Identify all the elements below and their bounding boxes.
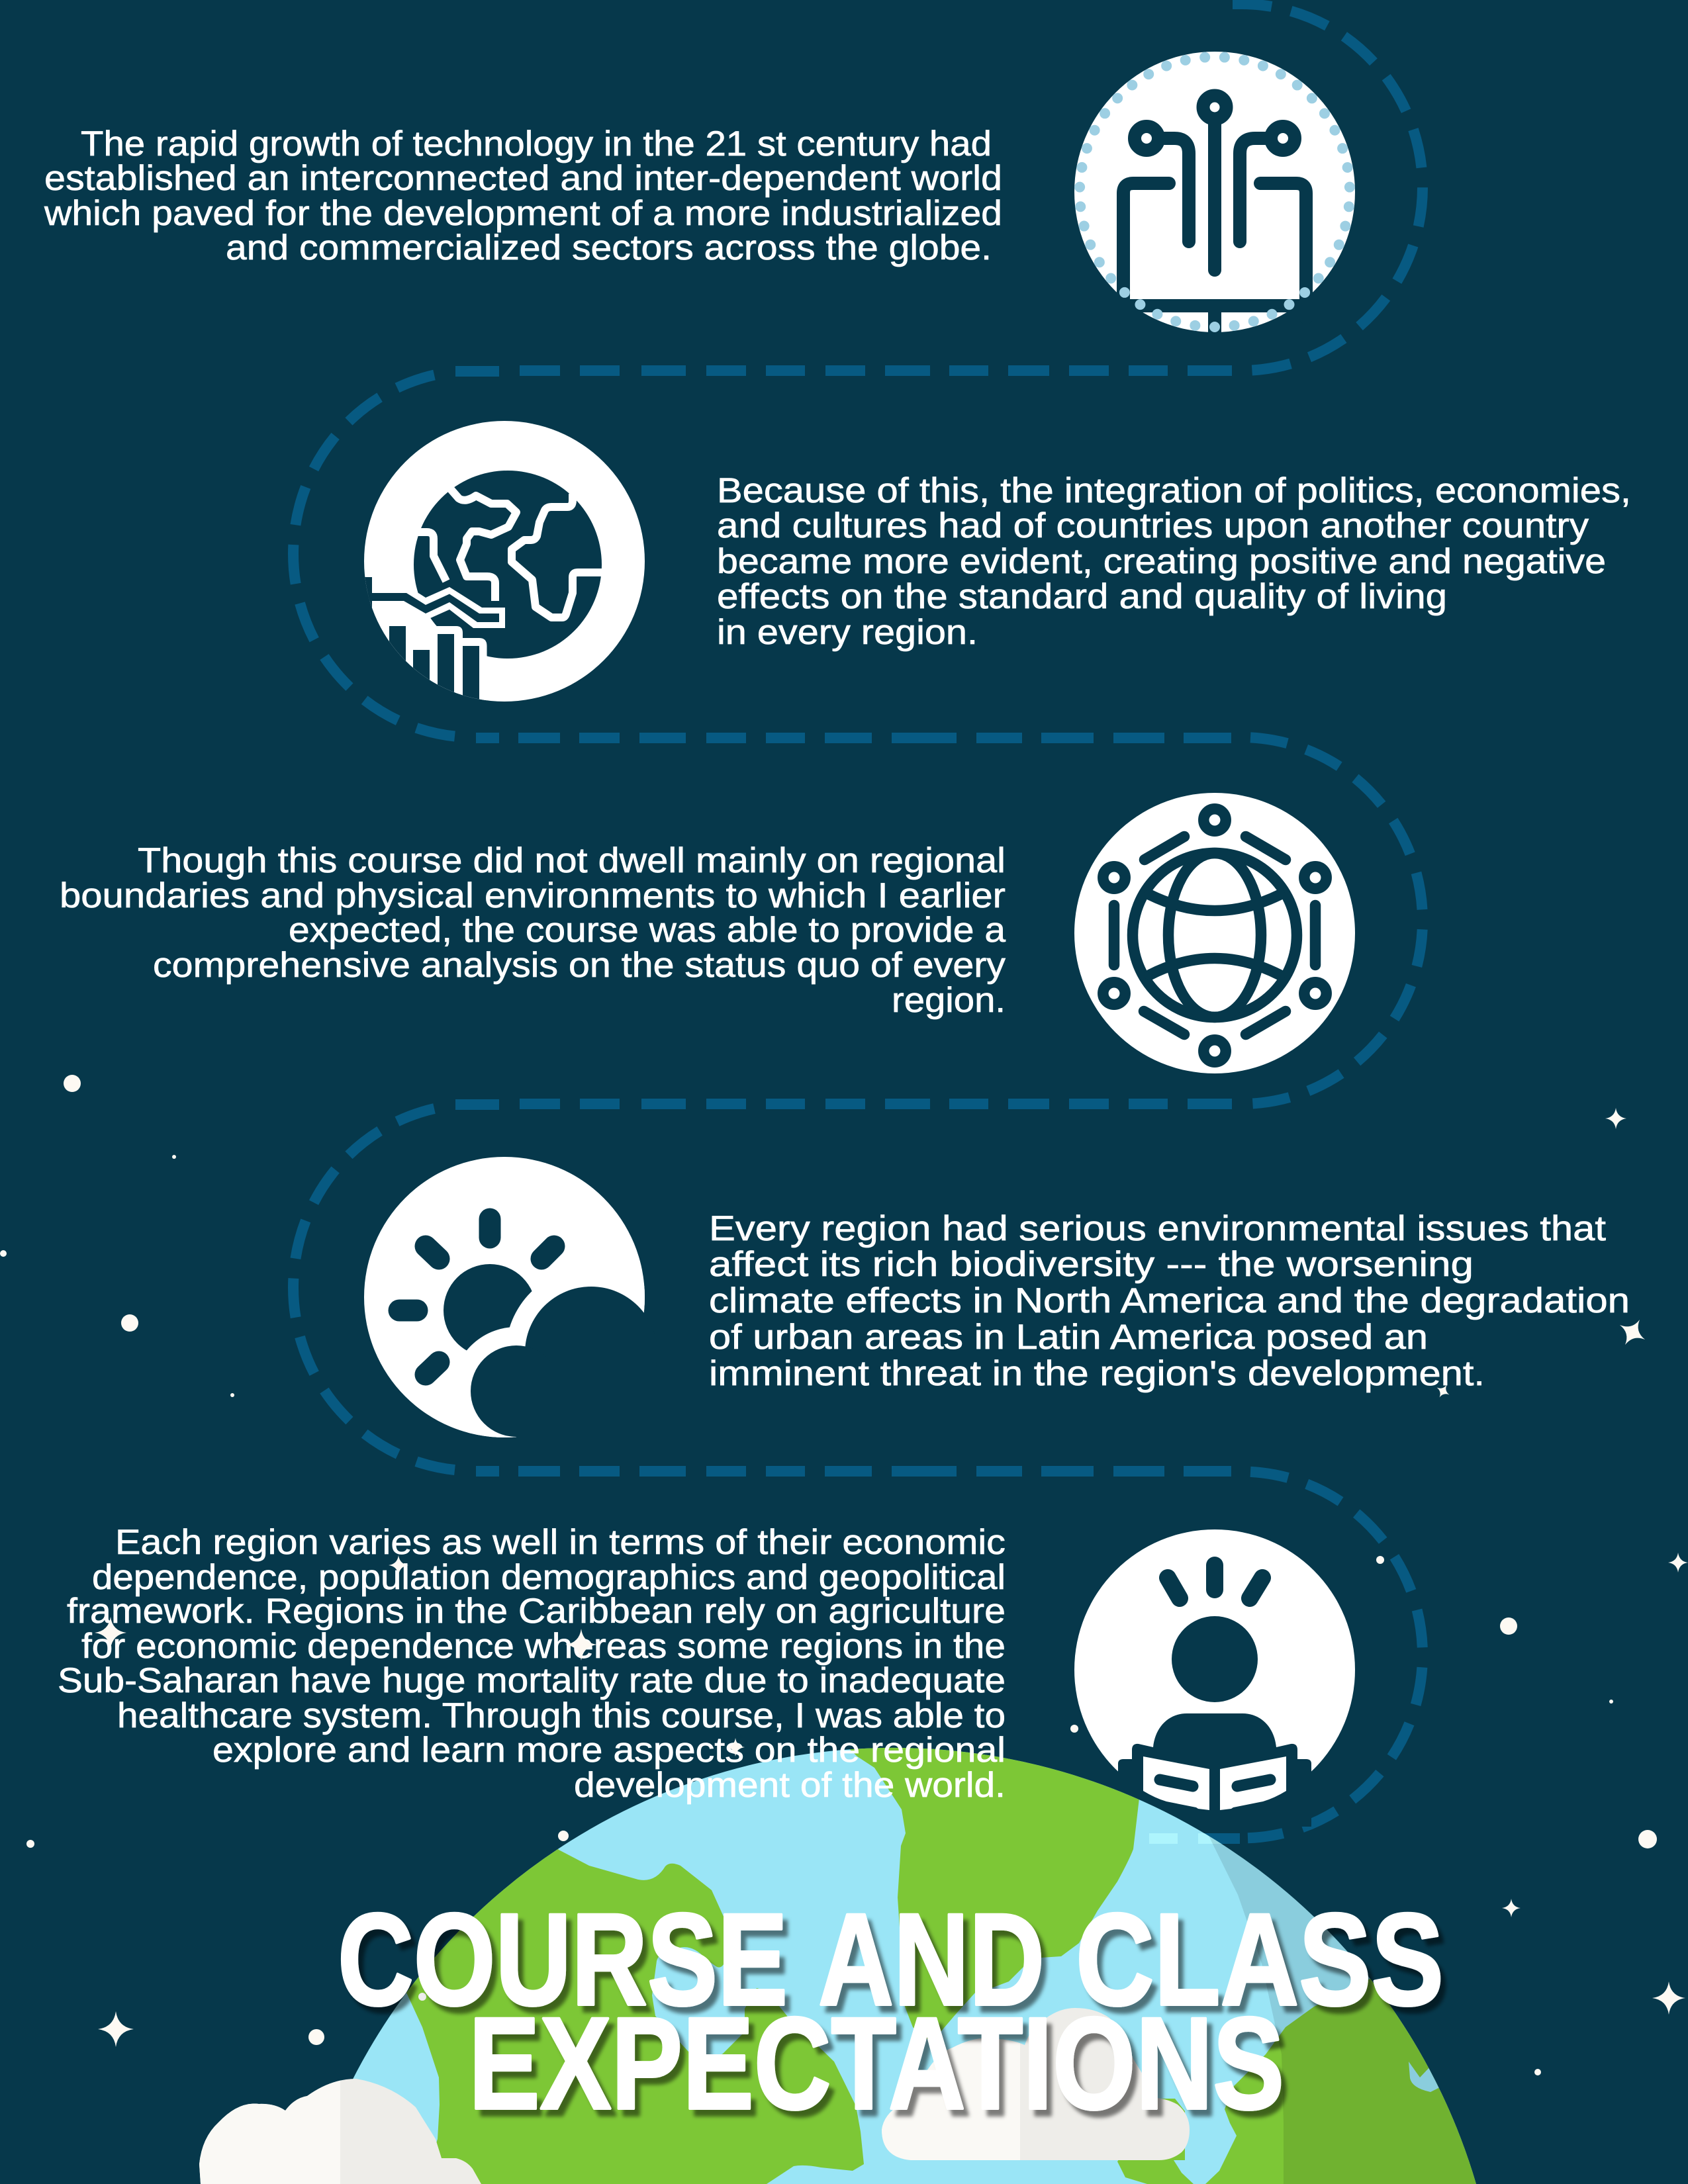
text block 4: affect its rich biodiversity --- the worsening: [709, 1245, 1474, 1284]
title: COURSE: [338, 1886, 788, 2032]
text block 4: [709, 1209, 1630, 1393]
icon: person reading book: [1074, 1529, 1355, 1827]
icon ring of light blue dots: [1080, 57, 1350, 327]
title: [338, 1886, 1444, 2136]
lake: [1409, 2062, 1439, 2092]
text block 1: and commercialized sectors across the globe.: [226, 228, 992, 267]
text block 4: imminent threat in the region's development.: [709, 1354, 1485, 1393]
icon: sun and cloud: [364, 1157, 645, 1437]
text block 2: became more evident, creating positive and negative: [717, 542, 1606, 581]
icon: globe network: [1074, 793, 1355, 1073]
land: right continent: [1205, 1979, 1476, 2184]
text block 4: of urban areas in Latin America posed an: [709, 1318, 1428, 1357]
text block 5: healthcare system. Through this course, I was able to: [117, 1696, 1006, 1735]
text block 2: in every region.: [717, 613, 978, 652]
land: lower centre: [1117, 2099, 1194, 2184]
small dot behind title: [418, 1993, 426, 2001]
icon: earth with city: [354, 421, 645, 713]
text block 5: for economic dependence whereas some regions in the: [81, 1627, 1006, 1666]
text block 1: established an interconnected and inter-dependent world: [44, 159, 1002, 198]
text block 1: The rapid growth of technology in the 21 st century had: [81, 124, 992, 163]
land: top centre continent: [841, 1734, 1141, 2041]
text block 2: [717, 471, 1631, 652]
dashed winding path: [293, 4, 1423, 1839]
text block 5: explore and learn more aspects on the regional: [212, 1731, 1006, 1770]
text block 2: effects on the standard and quality of living: [717, 577, 1447, 616]
text block 3: Though this course did not dwell mainly on regional: [138, 841, 1006, 880]
text block 4: Every region had serious environmental issues that: [709, 1209, 1606, 1248]
land: left continent: [397, 1840, 864, 2184]
text block 3: [60, 841, 1006, 1020]
text block 2: Because of this, the integration of politics, economies,: [717, 471, 1631, 510]
text block 5: dependence, population demographics and geopolitical: [92, 1558, 1006, 1597]
text block 2: and cultures had of countries upon another country: [717, 506, 1589, 545]
text block 3: boundaries and physical environments to which I earlier: [60, 876, 1006, 915]
title: EXPECTATIONS: [469, 1990, 1284, 2136]
text block 3: comprehensive analysis on the status quo of every: [153, 946, 1006, 985]
text block 1: [44, 124, 1002, 267]
icon: technology circuit book: [1074, 52, 1355, 334]
text block 3: expected, the course was able to provide a: [289, 911, 1006, 950]
text block 5: development of the world.: [574, 1766, 1006, 1805]
cloud: centre: [882, 2008, 1190, 2160]
dashes seen through globe: [1149, 1833, 1221, 1844]
stars and dots: [0, 1075, 1688, 2075]
text block 3: region.: [892, 981, 1006, 1020]
text block 5: Each region varies as well in terms of their economic: [115, 1523, 1006, 1562]
text block 5: framework. Regions in the Caribbean rely on agriculture: [67, 1592, 1006, 1631]
text block 5: Sub-Saharan have huge mortality rate due to inadequate: [58, 1661, 1006, 1700]
text block 4: climate effects in North America and the degradation: [709, 1281, 1630, 1320]
globe shading: [1209, 1836, 1476, 2184]
cloud: left: [199, 2079, 481, 2184]
globe illustration: [353, 1747, 1476, 2184]
title: CLASS: [1076, 1886, 1444, 2032]
text block 5: [58, 1523, 1006, 1805]
text block 1: which paved for the development of a more industrialized: [44, 194, 1002, 233]
title: AND: [818, 1886, 1045, 2032]
